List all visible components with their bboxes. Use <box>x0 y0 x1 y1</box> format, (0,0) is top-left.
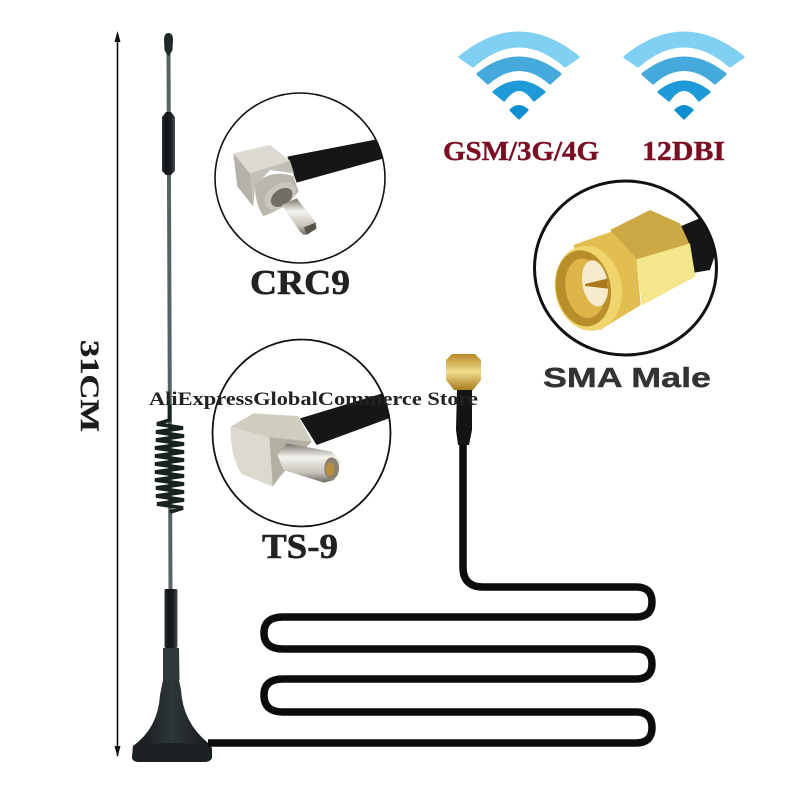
band 4 <box>511 106 527 118</box>
SMA connector circle <box>534 181 720 355</box>
band 4 <box>676 106 692 118</box>
label SMA Male: SMA Male <box>543 362 711 393</box>
label GSM/3G/4G: GSM/3G/4G <box>443 136 599 166</box>
height label: 31CM <box>75 340 104 432</box>
height dimension arrow <box>114 31 120 757</box>
wifi icon right <box>625 33 743 118</box>
band 3 <box>494 82 544 100</box>
CRC9 circle outline <box>215 93 385 263</box>
magnetic base <box>132 680 212 762</box>
hex collar <box>163 648 180 680</box>
label CRC9: CRC9 <box>250 263 350 302</box>
band 2 <box>478 58 560 83</box>
SMA plug on cable <box>446 354 481 445</box>
coaxial cable <box>208 445 652 743</box>
CRC9 photo <box>233 139 390 235</box>
label 12DBI: 12DBI <box>642 136 725 166</box>
plug strain relief <box>456 388 472 445</box>
band 2 <box>643 58 725 83</box>
gold plug body <box>446 354 481 390</box>
label TS-9: TS-9 <box>262 527 338 566</box>
base rim <box>132 743 212 762</box>
band 1 <box>460 33 578 66</box>
store watermark: AliExpressGlobalCommerce Store <box>149 390 478 410</box>
wifi icon left <box>460 33 578 118</box>
upper sleeve <box>162 112 175 175</box>
TS-9 connector circle <box>212 340 393 526</box>
TS-9 photo <box>231 392 393 487</box>
SMA circle outline <box>534 181 716 355</box>
SMA photo <box>554 210 714 331</box>
TS-9 circle outline <box>212 340 390 526</box>
CRC9 connector circle <box>215 93 390 263</box>
band 1 <box>625 33 743 66</box>
antenna whip <box>132 33 212 762</box>
spring coil <box>155 405 184 512</box>
antenna tip <box>164 33 173 56</box>
band 3 <box>659 82 709 100</box>
antenna rod <box>168 50 170 590</box>
lower sleeve <box>164 589 178 648</box>
